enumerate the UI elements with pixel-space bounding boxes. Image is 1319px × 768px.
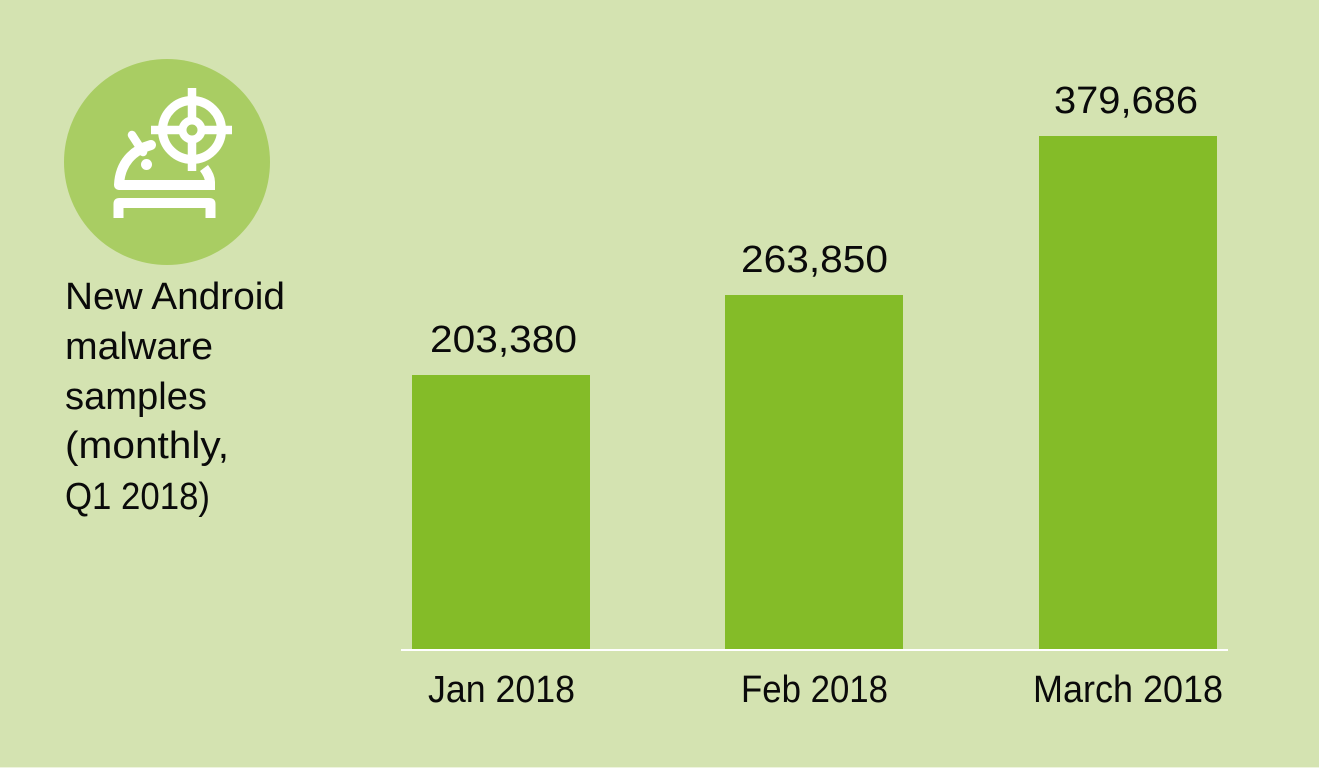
- bar: Feb 2018: Feb 2018: [741, 669, 888, 711]
- heading: chart title: New Android: [65, 276, 285, 318]
- icon part: android eye: [141, 159, 152, 170]
- bar: March 2018: March 2018: [1033, 669, 1223, 711]
- icon part: android head: [119, 135, 210, 185]
- heading: chart title: [65, 276, 285, 518]
- heading: chart title: Q1 2018): [65, 476, 210, 518]
- bar: Jan 2018: 203,380: [430, 319, 577, 361]
- bar: Feb 2018: [725, 239, 903, 711]
- icon part: crosshair target: [151, 88, 232, 171]
- icon: android with crosshair target: [64, 59, 270, 265]
- heading: chart title: (monthly,: [65, 425, 229, 467]
- bar: Jan 2018: [412, 319, 590, 711]
- bar: Feb 2018: 263,850: [741, 239, 888, 281]
- bar: Jan 2018: Jan 2018: [428, 669, 575, 711]
- heading: chart title: malware: [65, 326, 213, 368]
- icon part: android base: [114, 198, 216, 218]
- bar: March 2018: 379,686: [1054, 80, 1198, 122]
- bar chart: [401, 80, 1228, 711]
- bar: March 2018: [1033, 80, 1223, 711]
- heading: chart title: samples: [65, 376, 207, 418]
